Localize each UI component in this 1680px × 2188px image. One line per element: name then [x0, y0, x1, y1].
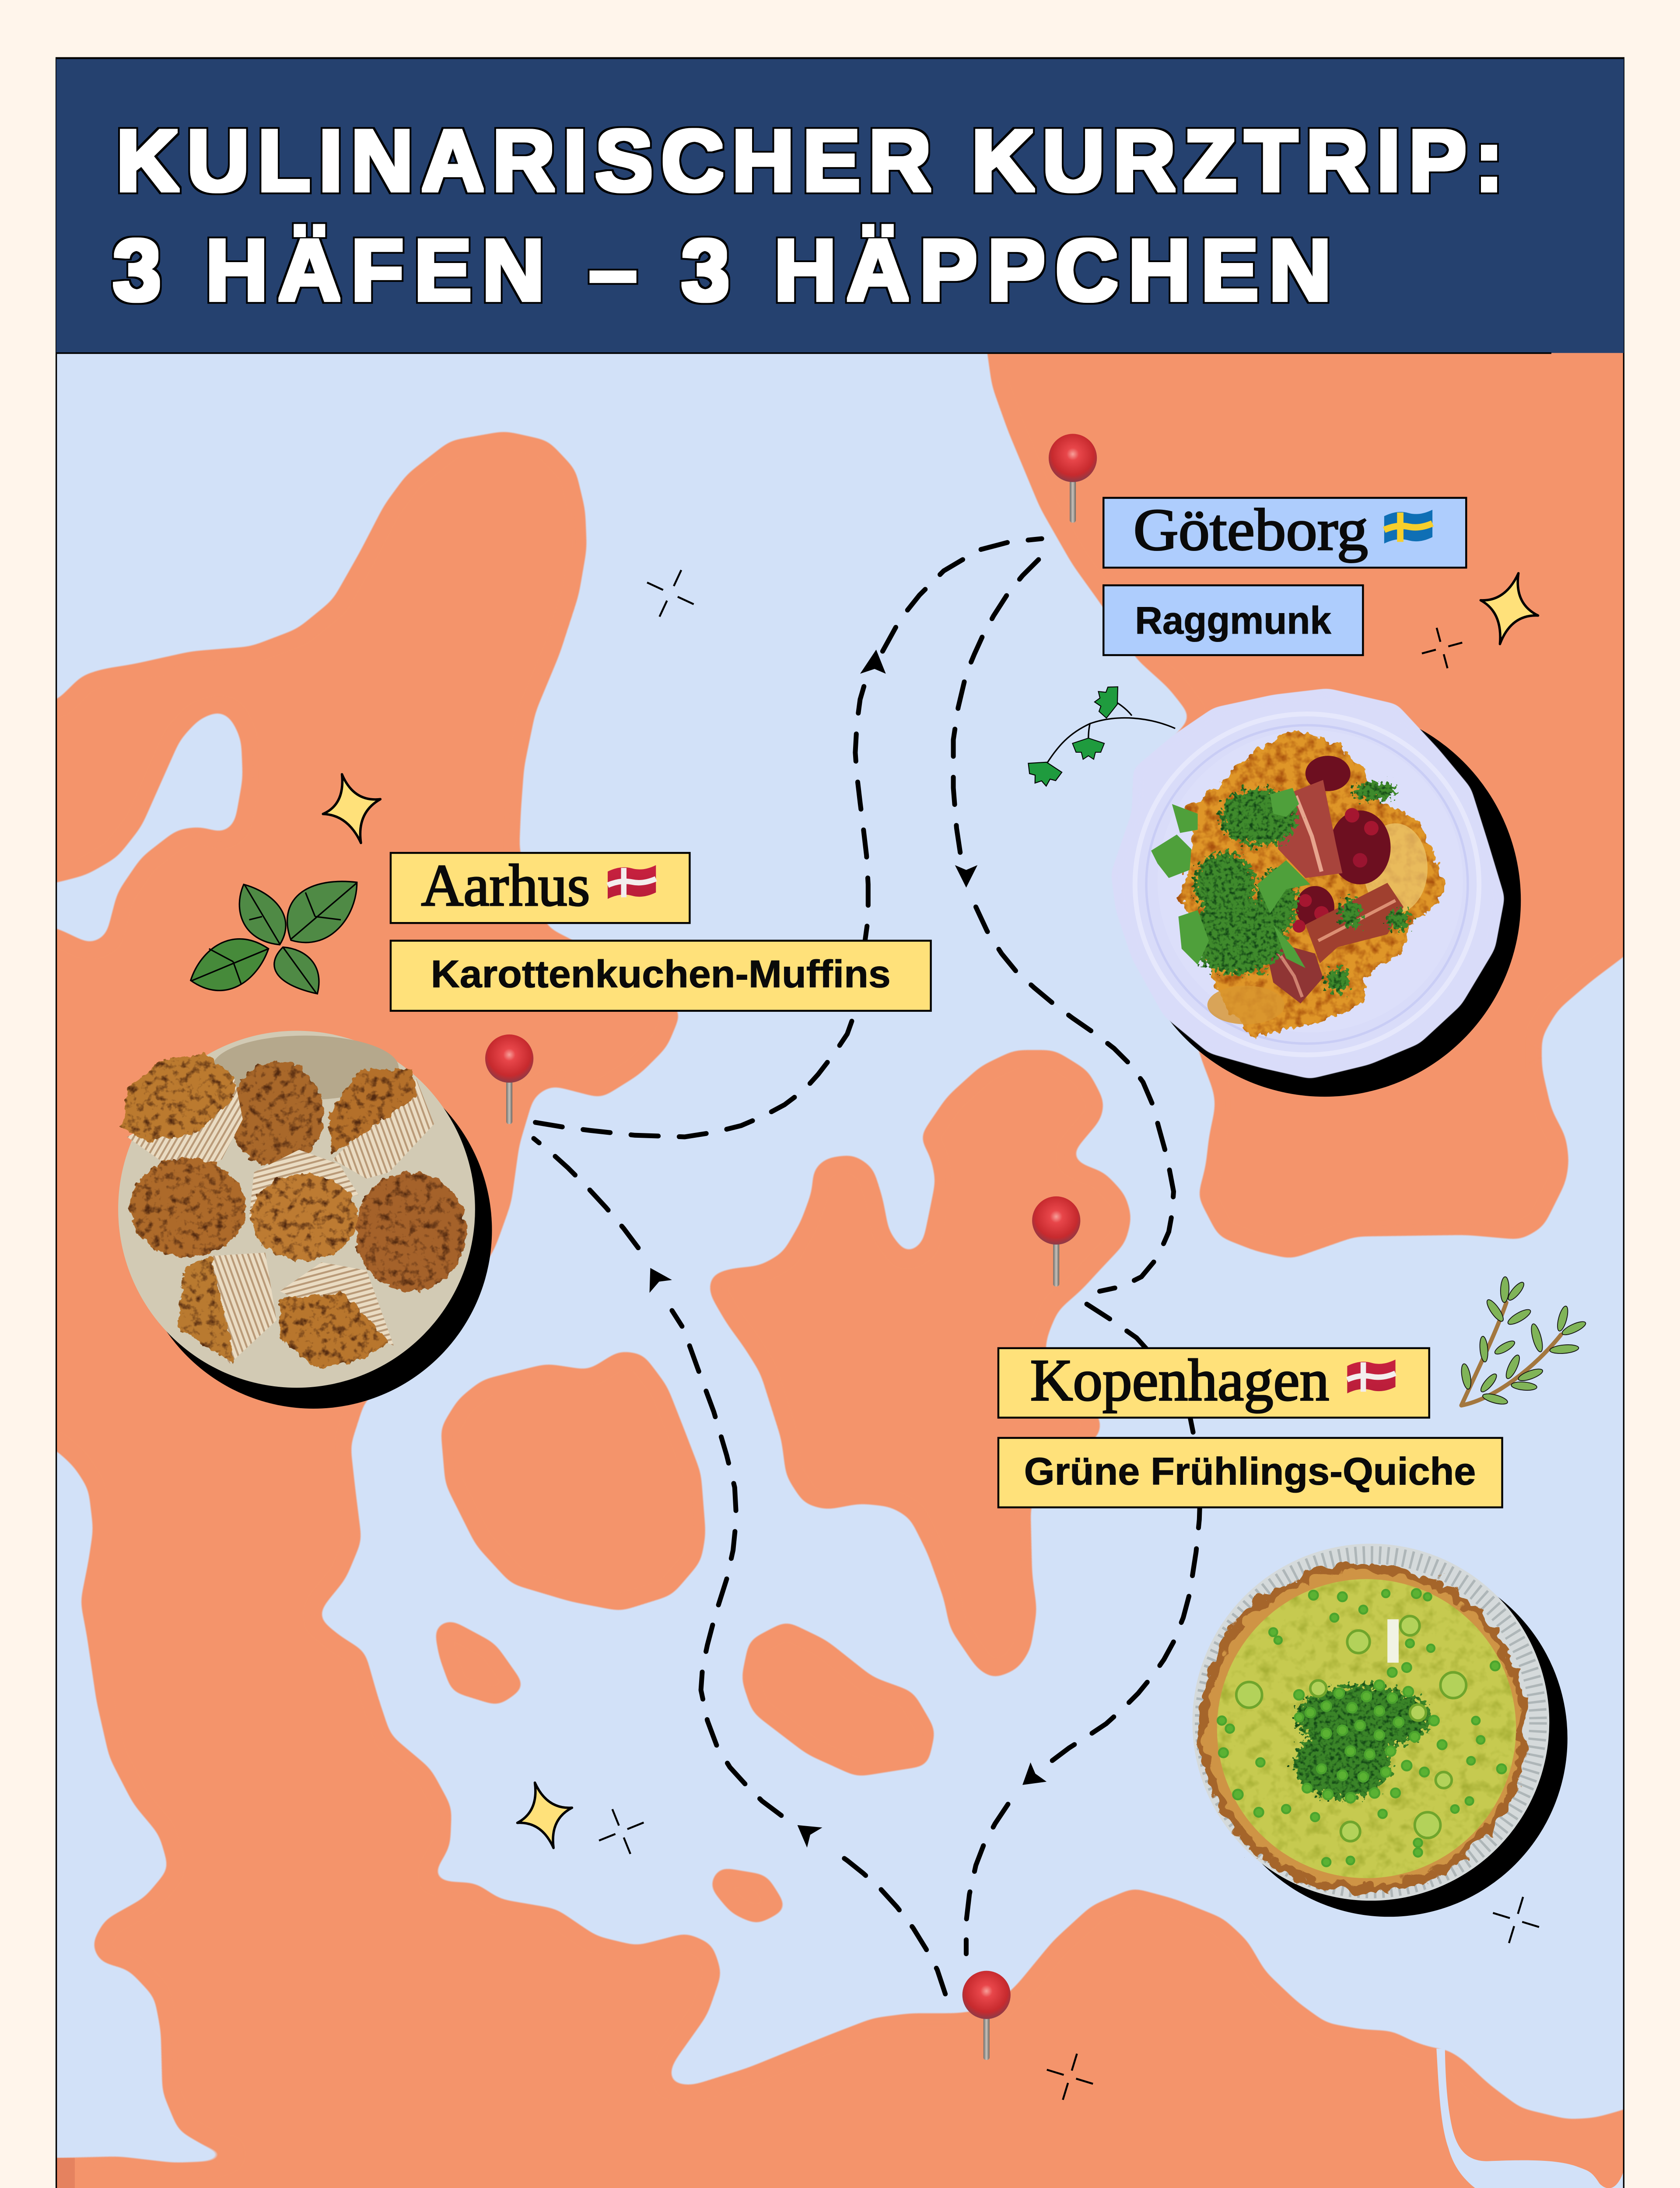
muffin 4 [130, 1158, 245, 1258]
icon: twinkle 4 [1486, 1890, 1546, 1950]
title: KULINARISCHER KURZTRIP: [116, 112, 1504, 209]
arrowhead [955, 865, 977, 887]
plate shadow [1129, 704, 1521, 1097]
muffin 2 [231, 1061, 324, 1168]
pin: Göteborg [1049, 434, 1097, 522]
plate [118, 1031, 475, 1388]
label: Raggmunk [1103, 586, 1363, 655]
label: Karottenkuchen-Muffins [391, 941, 931, 1011]
photo: Raggmunk plate [1111, 688, 1521, 1097]
label: Aarhus: Aarhus [421, 853, 590, 919]
pin: Kopenhagen [1032, 1196, 1080, 1287]
peas [1218, 1589, 1506, 1866]
icon: basil leaves [191, 881, 357, 994]
icon: Danish flag [1347, 1360, 1396, 1393]
dish [1192, 1544, 1549, 1900]
icon: Swedish flag [1384, 510, 1432, 543]
arrowhead [798, 1825, 822, 1848]
route: bottom harbour to Aarhus [534, 1139, 945, 1994]
photo: muffin plate [118, 1031, 492, 1409]
central herbs [1294, 1685, 1431, 1799]
label: Göteborg: Göteborg [1134, 497, 1368, 563]
muffin 8 [280, 1262, 394, 1368]
icon: Danish flag [608, 865, 656, 899]
map panel [57, 353, 1623, 2188]
route: Göteborg to Kopenhagen [953, 560, 1173, 1291]
header band [56, 58, 1624, 353]
label: Aarhus [391, 853, 690, 923]
inlet strip [1436, 2048, 1624, 2188]
label: Kopenhagen: Kopenhagen [1030, 1348, 1329, 1413]
arrowhead [1022, 1762, 1046, 1785]
icon: twinkle 1 [636, 559, 704, 628]
route: Aarhus to Göteborg [536, 539, 1042, 1137]
icon: thyme sprig [1460, 1276, 1587, 1406]
title [113, 112, 1504, 319]
dill and parsley [1151, 782, 1410, 994]
pin: Aarhus [485, 1034, 533, 1124]
muffin 6 [355, 1172, 466, 1291]
label: Göteborg [1103, 497, 1466, 568]
label: Grüne Frühlings-Quiche [998, 1438, 1502, 1508]
icon: twinkle 3 [590, 1800, 653, 1863]
crust [1198, 1563, 1519, 1885]
pin: southern harbour [962, 1971, 1011, 2060]
plate [1111, 688, 1505, 1079]
darker swatch at left edge [56, 2158, 75, 2188]
muffin 7 [177, 1253, 276, 1364]
label: Kopenhagen [998, 1348, 1429, 1418]
icon: sparkle south [517, 1783, 572, 1848]
lingonberry sauce [1292, 756, 1391, 933]
arrowhead [860, 650, 886, 674]
icon: twinkle 2 [1417, 622, 1468, 673]
bacon [1264, 780, 1404, 1003]
dish shadow [1211, 1560, 1568, 1917]
filling [1217, 1579, 1516, 1878]
route: Kopenhagen to bottom harbour [966, 1304, 1201, 1954]
title: 3 HÄFEN – 3 HÄPPCHEN [113, 222, 1331, 319]
muffin 3 [328, 1069, 434, 1179]
muffin 5 [249, 1150, 358, 1261]
label: Raggmunk: Raggmunk [1135, 599, 1332, 642]
arrowhead [650, 1268, 672, 1293]
label: Karottenkuchen-Muffins: Karottenkuchen-Muffins [431, 952, 891, 996]
icon: sparkle Aarhus [323, 774, 380, 843]
photo: quiche [1192, 1544, 1568, 1917]
leek rings [1236, 1616, 1466, 1841]
icon: sparkle Göteborg [1480, 573, 1538, 644]
hash brown [1182, 730, 1446, 1039]
leek white [1387, 1619, 1399, 1663]
plate shadow [135, 1052, 492, 1409]
icon: parsley sprig [1024, 681, 1175, 789]
label: Grüne Frühlings-Quiche: Grüne Frühlings-Quiche [1024, 1449, 1476, 1493]
muffin 1 [121, 1053, 243, 1175]
icon: twinkle 5 [1040, 2047, 1100, 2107]
